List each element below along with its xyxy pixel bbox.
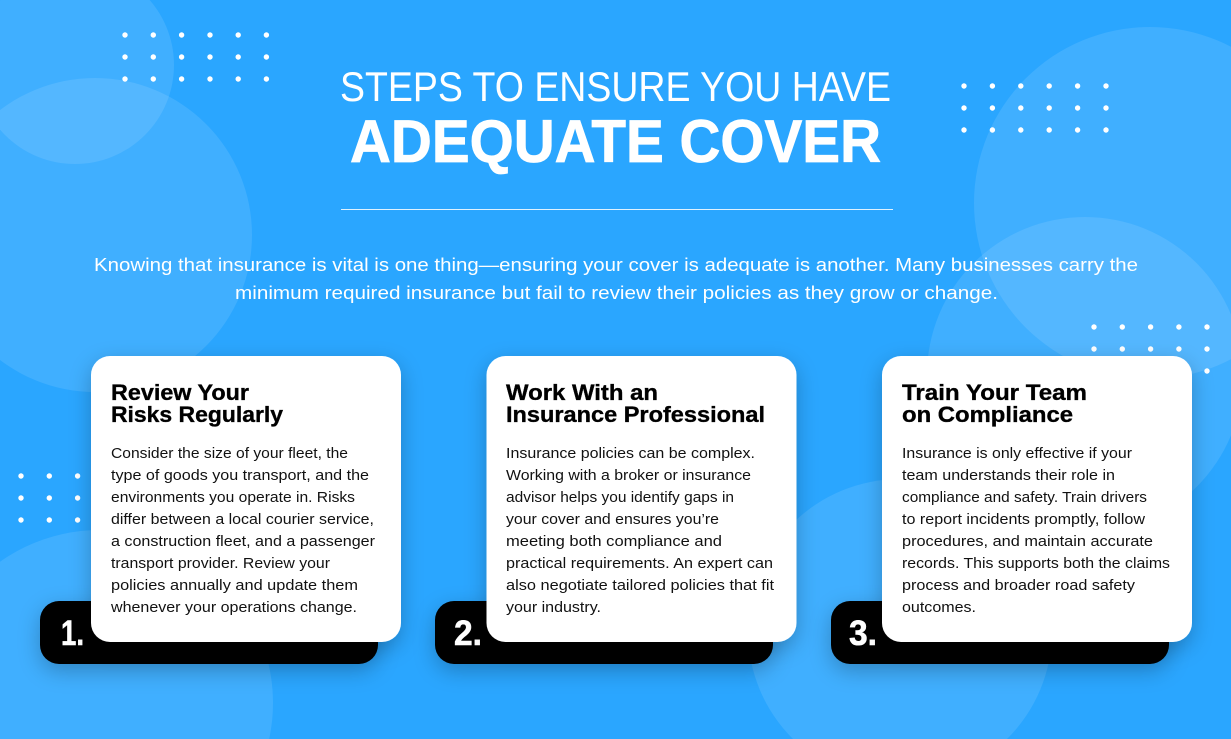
- number tab 2: 2.: [454, 614, 482, 653]
- intro paragraph: [94, 254, 1138, 303]
- title: STEPS TO ENSURE YOU HAVE: [340, 63, 891, 110]
- number tab 1: [40, 601, 378, 664]
- body text 2: Insurance policies can be complex.: [506, 445, 755, 462]
- intro paragraph: minimum required insurance but fail to review their policies as they grow or change.: [235, 282, 998, 303]
- body text 1: [110, 445, 375, 616]
- number tab 1: 1.: [61, 614, 84, 653]
- heading 1: [111, 380, 283, 427]
- heading 3: on Compliance: [902, 402, 1073, 427]
- heading 2: [506, 380, 765, 427]
- body text 3: outcomes.: [902, 599, 976, 616]
- body text 2: your industry.: [506, 599, 601, 616]
- body text 2: also negotiate tailored policies that fit: [506, 577, 775, 594]
- title: ADEQUATE COVER: [350, 108, 881, 175]
- heading 2: Insurance Professional: [506, 402, 765, 427]
- body text 3: [902, 445, 1170, 616]
- number tab 2: [435, 601, 773, 664]
- body text 1: a construction fleet, and a passenger: [111, 533, 375, 550]
- number tab 3: [831, 601, 1169, 664]
- body text 2: practical requirements. An expert can: [506, 555, 773, 572]
- number tab 3: 3.: [849, 614, 877, 653]
- heading 1: Risks Regularly: [111, 402, 283, 427]
- intro paragraph: Knowing that insurance is vital is one thing—ensuring your cover is adequate is another. Many businesses carry the: [94, 254, 1138, 275]
- dot grid: top right: [961, 83, 1109, 133]
- dot grid: top left: [122, 32, 269, 82]
- body text 1: whenever your operations change.: [110, 599, 357, 616]
- body text 3: process and broader road safety: [902, 577, 1136, 594]
- card 1: [91, 356, 401, 642]
- heading 1: Review Your: [111, 380, 249, 405]
- body text 2: your cover and ensures you’re: [506, 511, 719, 528]
- heading 3: [902, 380, 1087, 427]
- body text 1: policies annually and update them: [111, 577, 358, 594]
- heading 2: Work With an: [506, 380, 658, 405]
- dot grid: right: [1091, 324, 1210, 374]
- body text 1: environments you operate in. Risks: [111, 489, 355, 506]
- body text 3: records. This supports both the claims: [902, 555, 1170, 572]
- body text 3: team understands their role in: [902, 467, 1115, 484]
- panel: step 3: [831, 356, 1192, 664]
- body text 2: advisor helps you identify gaps in: [506, 489, 734, 506]
- dot grid: left: [18, 473, 80, 523]
- card 3: [882, 356, 1192, 642]
- body text 3: procedures, and maintain accurate: [902, 533, 1153, 550]
- panel: step 1: [40, 356, 401, 664]
- body text 3: to report incidents promptly, follow: [902, 511, 1145, 528]
- body text 2: [506, 445, 775, 616]
- body text 1: Consider the size of your fleet, the: [111, 445, 348, 462]
- body text 1: differ between a local courier service,: [111, 511, 374, 528]
- body text 2: Working with a broker or insurance: [506, 467, 751, 484]
- title divider: [341, 209, 893, 210]
- title: [340, 63, 891, 175]
- body text 1: type of goods you transport, and the: [111, 467, 369, 484]
- body text 3: compliance and safety. Train drivers: [902, 489, 1147, 506]
- body text 1: transport provider. Review your: [111, 555, 330, 572]
- panel: step 2: [435, 356, 796, 664]
- body text 3: Insurance is only effective if your: [902, 445, 1132, 462]
- body text 2: meeting both compliance and: [506, 533, 722, 550]
- heading 3: Train Your Team: [902, 380, 1087, 405]
- card 2: [486, 356, 796, 642]
